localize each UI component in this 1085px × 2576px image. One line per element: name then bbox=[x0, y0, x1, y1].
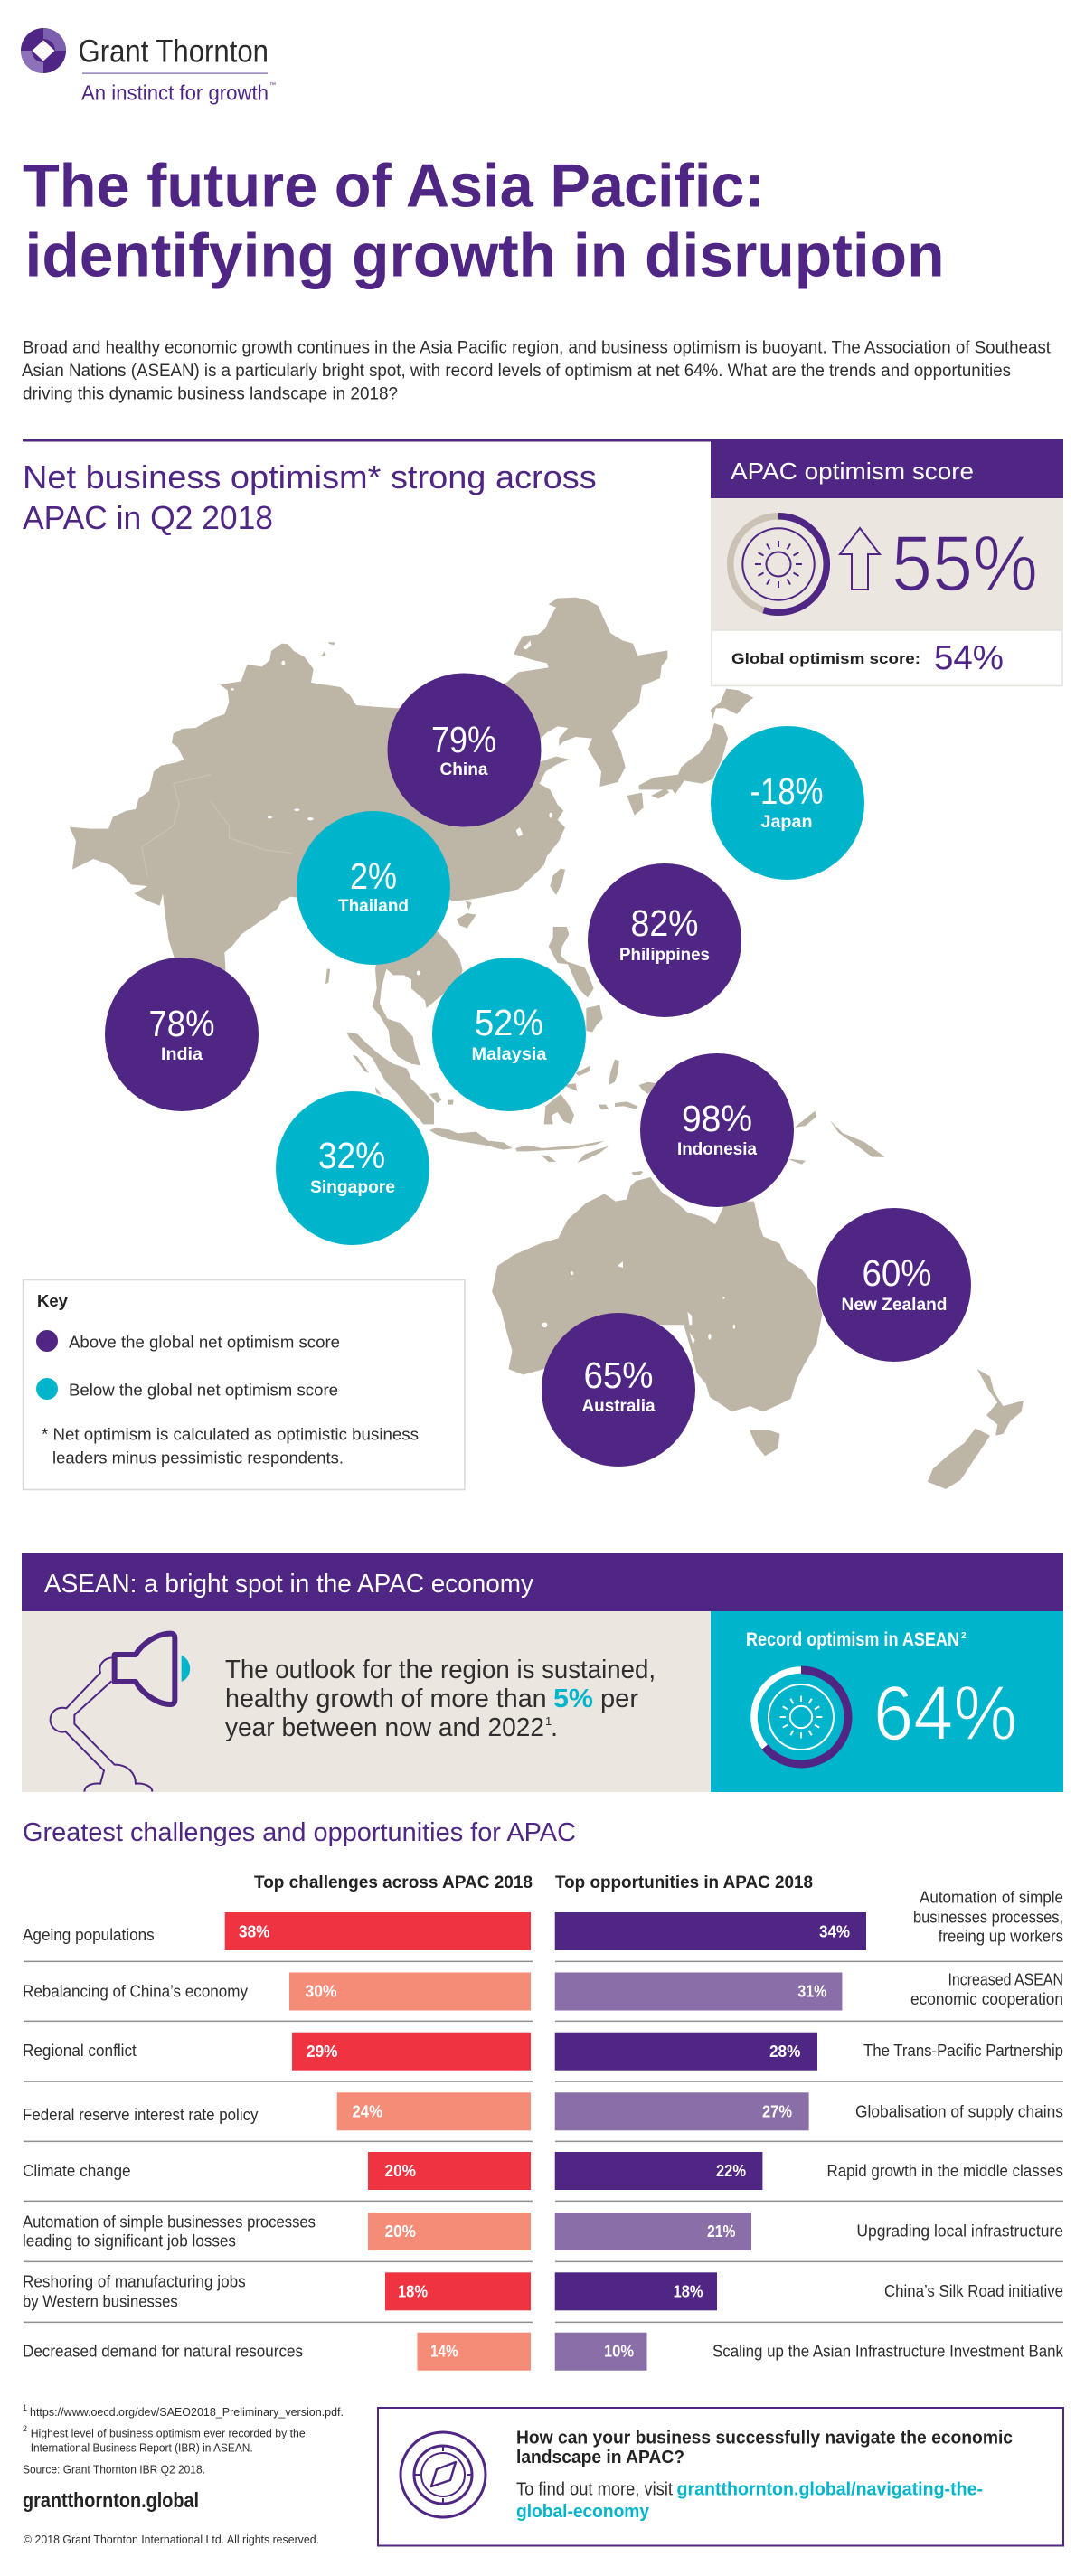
bubble: Singapore bbox=[276, 1091, 429, 1245]
opportunity: Globalisation of supply chains 27%: 27% bbox=[762, 2103, 792, 2121]
link text: To find out more, visit bbox=[516, 2479, 673, 2499]
icon: logo swirl bbox=[21, 28, 66, 73]
banner: ASEAN bbox=[22, 1553, 1063, 1611]
bubble: Australia: 65% bbox=[584, 1354, 653, 1396]
link text: grantthornton.global/navigating-the- bbox=[676, 2479, 983, 2499]
icon: sun gauge 64% bbox=[754, 1670, 848, 1764]
link text bbox=[516, 2479, 983, 2522]
bubble: Australia bbox=[542, 1313, 695, 1467]
opportunity: Rapid growth in the middle classes 22% bbox=[555, 2152, 1063, 2190]
challenge: Reshoring of manufacturing jobs 18%: by Western businesses bbox=[23, 2292, 178, 2310]
title: identifying growth in disruption bbox=[25, 222, 944, 290]
outlook text bbox=[225, 1656, 656, 1742]
panel: ASEAN outlook bbox=[22, 1611, 711, 1792]
bubble: Japan bbox=[711, 726, 864, 880]
question bbox=[516, 2429, 1013, 2467]
logo: Grant Thornton bbox=[21, 28, 276, 105]
opportunity: Automation of simple businesses processes 34%: freeing up workers bbox=[939, 1928, 1063, 1946]
bubble: Singapore: Singapore bbox=[310, 1178, 395, 1197]
panel: APAC optimism score bbox=[711, 440, 1063, 685]
key note bbox=[42, 1425, 419, 1467]
bubble: Indonesia: Indonesia bbox=[677, 1140, 757, 1159]
bubble: Australia: Australia bbox=[582, 1397, 656, 1416]
footnotes: Highest level of business optimism ever recorded by the bbox=[31, 2426, 306, 2439]
panel heading: APAC optimism score bbox=[731, 458, 974, 485]
challenge: Federal reserve interest rate policy 24% bbox=[23, 2092, 531, 2130]
key item: above: Above the global net optimism score bbox=[69, 1333, 340, 1351]
column heading: challenges: Top challenges across APAC 2018 bbox=[254, 1873, 533, 1892]
bubble: Malaysia bbox=[432, 958, 586, 1111]
value: 64%: 64% bbox=[873, 1671, 1017, 1757]
challenge: Reshoring of manufacturing jobs 18%: Reshoring of manufacturing jobs bbox=[23, 2272, 246, 2290]
challenge: Climate change 20% bbox=[23, 2152, 531, 2190]
copyright: © 2018 Grant Thornton International Ltd. All rights reserved. bbox=[24, 2533, 319, 2546]
bubble: China bbox=[387, 673, 541, 826]
tagline: An instinct for growth bbox=[81, 81, 269, 105]
intro text: Broad and healthy economic growth continues in the Asia Pacific region, and business optimism is buoyant. The Association of Southeast bbox=[23, 339, 1052, 358]
bubble: Thailand: Thailand bbox=[338, 897, 409, 916]
bubble: Japan: -18% bbox=[750, 770, 823, 812]
map: east China, Korea, Japan, Taiwan bbox=[398, 598, 753, 929]
challenge: Regional conflict 29% bbox=[23, 2033, 531, 2071]
icon: sun gauge 55% bbox=[731, 516, 826, 612]
bubble: India: 78% bbox=[148, 1003, 215, 1044]
challenge: Ageing populations 38%: 38% bbox=[239, 1923, 269, 1941]
heading: net business optimism: APAC in Q2 2018 bbox=[23, 499, 273, 536]
challenge: Regional conflict 29%: 29% bbox=[307, 2043, 338, 2061]
bubble: Japan: Japan bbox=[761, 813, 812, 832]
bubble: Philippines bbox=[588, 863, 741, 1017]
map: central Asia and India bbox=[70, 642, 500, 992]
outlook text: . bbox=[551, 1713, 558, 1742]
question: How can your business successfully navigate the economic bbox=[516, 2429, 1013, 2449]
footnotes: 1 bbox=[23, 2403, 27, 2412]
challenge: Decreased demand for natural resources 14% bbox=[23, 2333, 531, 2371]
bubble: Thailand bbox=[297, 811, 450, 965]
bubble: Philippines: 82% bbox=[631, 902, 698, 944]
intro text: driving this dynamic business landscape in 2018? bbox=[23, 384, 398, 403]
opportunity: Automation of simple businesses processes 34%: Automation of simple bbox=[920, 1889, 1063, 1907]
intro text bbox=[22, 339, 1052, 403]
opportunity: Automation of simple businesses processes 34% bbox=[555, 1889, 1063, 1950]
key note: * Net optimism is calculated as optimistic business bbox=[42, 1425, 419, 1443]
icon: desk lamp bbox=[51, 1634, 190, 1792]
outlook text: healthy growth of more than bbox=[225, 1684, 547, 1713]
opportunity: China's Silk Road initiative 18% bbox=[555, 2272, 1063, 2310]
link text: global-economy bbox=[516, 2502, 650, 2522]
opportunity: Rapid growth in the middle classes 22%: 22% bbox=[716, 2162, 746, 2180]
panel heading: 2 bbox=[961, 1631, 967, 1641]
bubble: Philippines: Philippines bbox=[619, 946, 710, 965]
key title: Key bbox=[37, 1292, 68, 1310]
outlook text: 5% bbox=[553, 1684, 593, 1713]
value: 55%: 55% bbox=[892, 520, 1038, 608]
banner: ASEAN: ASEAN: a bright spot in the APAC economy bbox=[44, 1570, 533, 1599]
panel: record optimism in ASEAN bbox=[711, 1611, 1063, 1792]
challenge: Decreased demand for natural resources 14%: 14% bbox=[430, 2343, 458, 2361]
map of Asia Pacific bbox=[70, 598, 1024, 1489]
logo: Grant Thornton: ™ bbox=[269, 82, 276, 89]
outlook text: The outlook for the region is sustained, bbox=[225, 1656, 656, 1684]
outlook text: 1 bbox=[545, 1714, 552, 1728]
challenge: Reshoring of manufacturing jobs 18%: 18% bbox=[398, 2283, 428, 2301]
opportunity: Increased ASEAN economic cooperation 31%: economic cooperation bbox=[910, 1990, 1063, 2008]
bubble: Indonesia bbox=[640, 1053, 794, 1207]
key item: below: Below the global net optimism score bbox=[69, 1382, 338, 1400]
wordmark: Grant Thornton bbox=[78, 33, 269, 69]
opportunity: The Trans-Pacific Partnership 28% bbox=[555, 2033, 1063, 2071]
challenge: Automation of simple businesses processes 20%: Automation of simple businesses processes bbox=[23, 2213, 316, 2231]
bubble: New Zealand bbox=[817, 1208, 971, 1362]
bubble: Thailand: 2% bbox=[350, 855, 397, 897]
challenge: Rebalancing of China's economy 30%: Rebalancing of China’s economy bbox=[23, 1983, 248, 2001]
panel: key bbox=[24, 1280, 465, 1490]
opportunity: Scaling up the Asian Infrastructure Investment Bank 10%: 10% bbox=[604, 2343, 634, 2361]
opportunity: Rapid growth in the middle classes 22%: Rapid growth in the middle classes bbox=[826, 2162, 1063, 2180]
column heading: opportunities: Top opportunities in APAC 2018 bbox=[555, 1873, 813, 1892]
challenge: Decreased demand for natural resources 14%: Decreased demand for natural resources bbox=[23, 2343, 303, 2361]
challenge: Rebalancing of China's economy 30% bbox=[23, 1973, 531, 2011]
challenge: Regional conflict 29%: Regional conflict bbox=[23, 2042, 137, 2060]
bubble: India bbox=[105, 958, 259, 1111]
bubble: China: China bbox=[439, 760, 488, 779]
opportunity: Increased ASEAN economic cooperation 31% bbox=[555, 1971, 1063, 2011]
opportunity: Increased ASEAN economic cooperation 31%: Increased ASEAN bbox=[948, 1971, 1063, 1989]
bubble: Indonesia: 98% bbox=[682, 1098, 752, 1139]
opportunity: The Trans-Pacific Partnership 28%: 28% bbox=[769, 2043, 800, 2061]
footnotes: Source: Grant Thornton IBR Q2 2018. bbox=[23, 2462, 205, 2476]
title bbox=[23, 152, 944, 290]
opportunity: The Trans-Pacific Partnership 28%: The Trans-Pacific Partnership bbox=[863, 2042, 1063, 2060]
challenge: Automation of simple businesses processes 20%: 20% bbox=[385, 2222, 416, 2241]
footnotes: International Business Report (IBR) in ASEAN. bbox=[31, 2441, 253, 2455]
challenge: Rebalancing of China's economy 30%: 30% bbox=[306, 1983, 336, 2001]
challenge: Climate change 20%: 20% bbox=[385, 2162, 416, 2180]
opportunity: Upgrading local infrastructure 21%: Upgrading local infrastructure bbox=[856, 2222, 1063, 2241]
outlook text: year between now and 2022 bbox=[225, 1713, 544, 1742]
bubble: Malaysia: 52% bbox=[475, 1002, 543, 1043]
heading: net business optimism bbox=[23, 458, 597, 536]
title: The future of Asia Pacific: bbox=[23, 152, 765, 221]
bubble: New Zealand: 60% bbox=[863, 1252, 931, 1294]
heading: net business optimism: Net business optimism* strong across bbox=[23, 458, 597, 495]
challenge: Ageing populations 38% bbox=[23, 1912, 531, 1950]
opportunity: Globalisation of supply chains 27%: Globalisation of supply chains bbox=[855, 2103, 1063, 2121]
global score label: Global optimism score: bbox=[731, 650, 920, 667]
bubble: China: 79% bbox=[431, 719, 496, 760]
opportunity: Scaling up the Asian Infrastructure Investment Bank 10%: Scaling up the Asian Infrastructure Investment Bank bbox=[712, 2343, 1064, 2361]
opportunity: Scaling up the Asian Infrastructure Investment Bank 10% bbox=[555, 2333, 1064, 2371]
panel heading: Record optimism in ASEAN bbox=[746, 1629, 959, 1650]
opportunity: Globalisation of supply chains 27% bbox=[555, 2092, 1063, 2130]
key note: leaders minus pessimistic respondents. bbox=[52, 1449, 344, 1467]
bubble: New Zealand: New Zealand bbox=[841, 1296, 948, 1315]
challenge: Reshoring of manufacturing jobs 18% bbox=[23, 2272, 531, 2310]
footnotes: https://www.oecd.org/dev/SAEO2018_Preliminary_version.pdf. bbox=[30, 2405, 344, 2419]
bubble: Malaysia: Malaysia bbox=[472, 1045, 547, 1064]
map: south-east Asia and Indonesia bbox=[326, 927, 657, 1175]
opportunity: Upgrading local infrastructure 21%: 21% bbox=[707, 2222, 736, 2241]
challenge: Ageing populations 38%: Ageing populations bbox=[23, 1926, 155, 1944]
value: 54%: 54% bbox=[934, 639, 1004, 677]
icon: compass bbox=[401, 2432, 486, 2517]
bubble: India: India bbox=[161, 1045, 203, 1064]
intro text: Asian Nations (ASEAN) is a particularly bright spot, with record levels of optimism at net 64%. What are the trends and opportunities bbox=[22, 362, 1011, 381]
icon: up arrow bbox=[840, 528, 880, 590]
outlook text: per bbox=[600, 1684, 638, 1713]
opportunity: China's Silk Road initiative 18%: 18% bbox=[674, 2283, 703, 2301]
question: landscape in APAC? bbox=[516, 2448, 684, 2467]
opportunity: Increased ASEAN economic cooperation 31%: 31% bbox=[797, 1983, 826, 2001]
challenge: Federal reserve interest rate policy 24%: 24% bbox=[353, 2103, 382, 2121]
opportunity: Automation of simple businesses processes 34%: businesses processes, bbox=[913, 1909, 1063, 1927]
challenge: Automation of simple businesses processes 20% bbox=[23, 2213, 531, 2250]
footnotes bbox=[23, 2403, 344, 2476]
opportunity: China's Silk Road initiative 18%: China’s Silk Road initiative bbox=[884, 2282, 1063, 2300]
challenge: Climate change 20%: Climate change bbox=[23, 2162, 131, 2180]
heading: greatest challenges and opportunities: Greatest challenges and opportunities for APAC bbox=[23, 1818, 576, 1847]
opportunity: Automation of simple businesses processes 34%: 34% bbox=[819, 1923, 850, 1941]
map: Australia, Papua New Guinea, New Zealand bbox=[492, 1111, 1024, 1489]
opportunity: Upgrading local infrastructure 21% bbox=[555, 2213, 1063, 2250]
website: grantthornton.global bbox=[23, 2488, 199, 2512]
footnotes: 2 bbox=[23, 2424, 27, 2433]
panel: call to action bbox=[378, 2408, 1063, 2546]
bubble: Singapore: 32% bbox=[318, 1135, 385, 1176]
challenge: Federal reserve interest rate policy 24%: Federal reserve interest rate policy bbox=[23, 2106, 259, 2124]
challenge: Automation of simple businesses processes 20%: leading to significant job losses bbox=[23, 2232, 236, 2250]
